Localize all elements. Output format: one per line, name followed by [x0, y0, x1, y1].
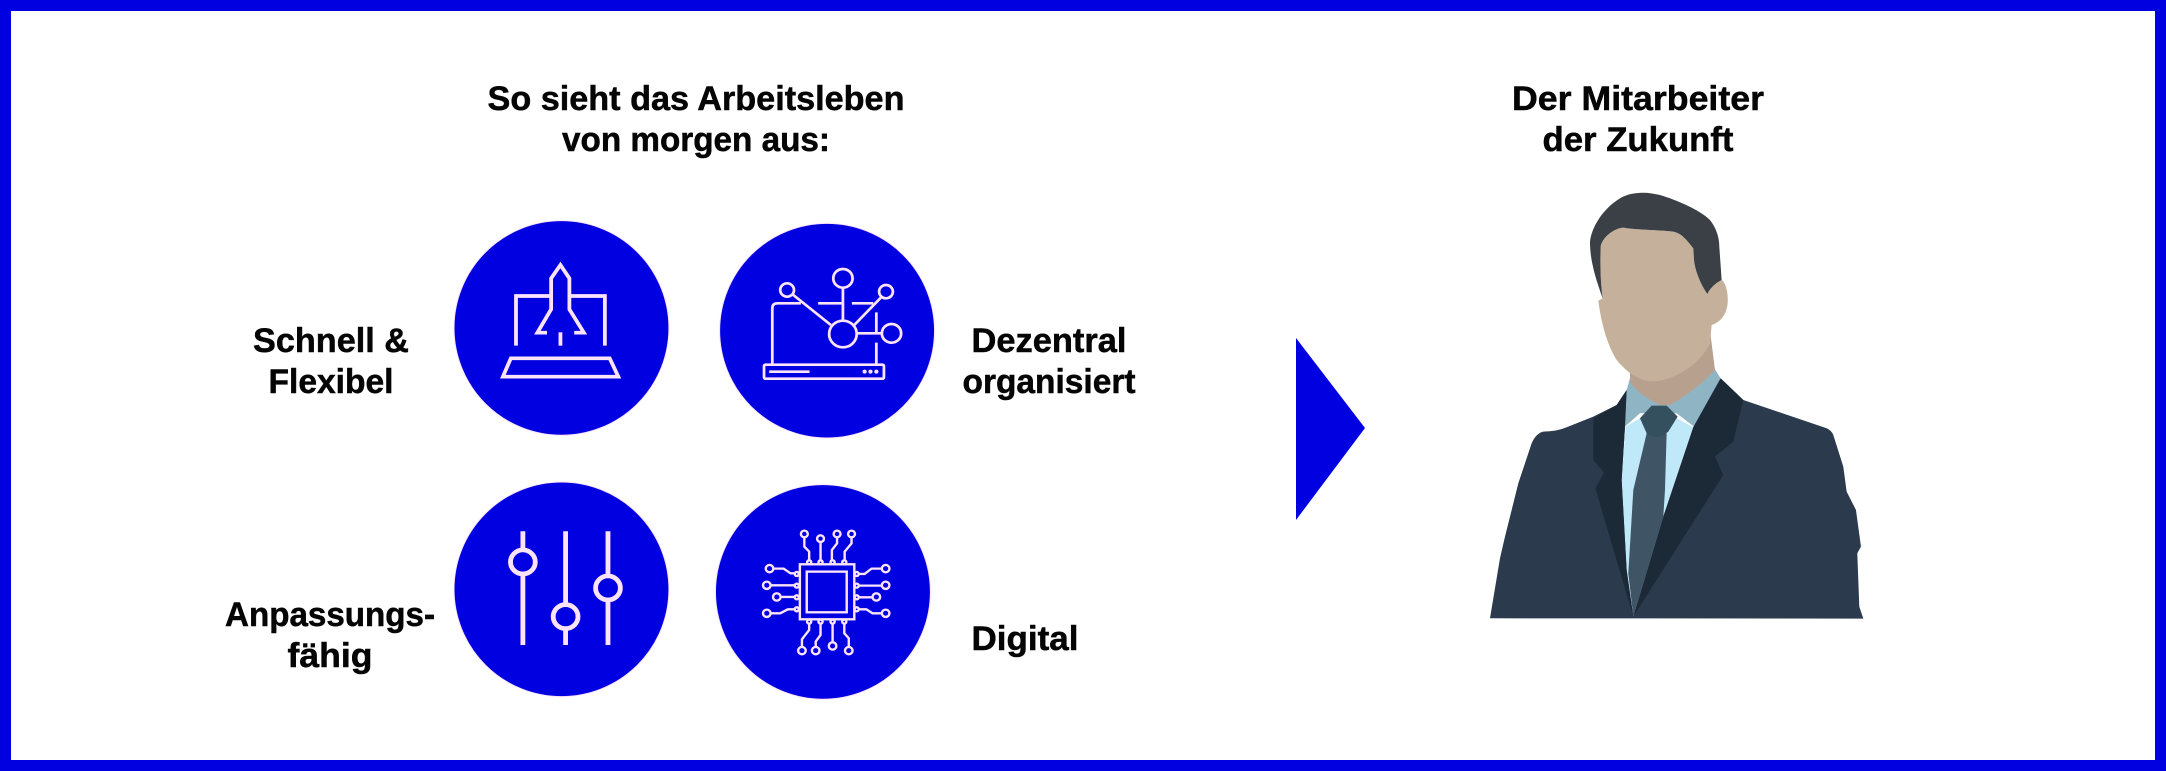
heading: right [1512, 80, 1764, 159]
icon: rocket on laptop [454, 221, 669, 435]
heading: right: Der Mitarbeiter [1512, 80, 1764, 118]
neck [1630, 330, 1715, 405]
hair [1590, 193, 1722, 298]
icon: decentral network laptop [720, 223, 935, 438]
heading: left: von morgen aus: [562, 121, 830, 159]
label: Digital: Digital [972, 620, 1078, 658]
label: Anpassungsfaehig: Anpassungs- [225, 596, 435, 634]
label: Dezentral organisiert: Dezentral [972, 322, 1126, 360]
icon: microchip [715, 485, 930, 699]
arrow [1296, 338, 1365, 520]
shirt [1622, 418, 1693, 617]
face [1598, 228, 1728, 381]
figure: employee of the future [1490, 193, 1863, 619]
label: Schnell und Flexibel [253, 322, 409, 401]
tie [1628, 433, 1667, 617]
head [1590, 193, 1728, 381]
lapels [1593, 378, 1743, 617]
jacket [1490, 378, 1863, 619]
label: Schnell und Flexibel: Flexibel [268, 363, 394, 401]
label: Schnell und Flexibel: Schnell & [253, 322, 409, 360]
label: Anpassungsfaehig: fähig [288, 637, 372, 675]
label: Dezentral organisiert [962, 322, 1136, 401]
label: Dezentral organisiert: organisiert [962, 363, 1136, 401]
heading: left [488, 80, 904, 159]
icon: sliders [454, 482, 669, 697]
heading: left: So sieht das Arbeitsleben [488, 80, 904, 118]
tie knot [1640, 406, 1678, 437]
heading: right: der Zukunft [1542, 121, 1734, 159]
label: Anpassungsfaehig [225, 596, 435, 675]
collar [1625, 367, 1721, 430]
